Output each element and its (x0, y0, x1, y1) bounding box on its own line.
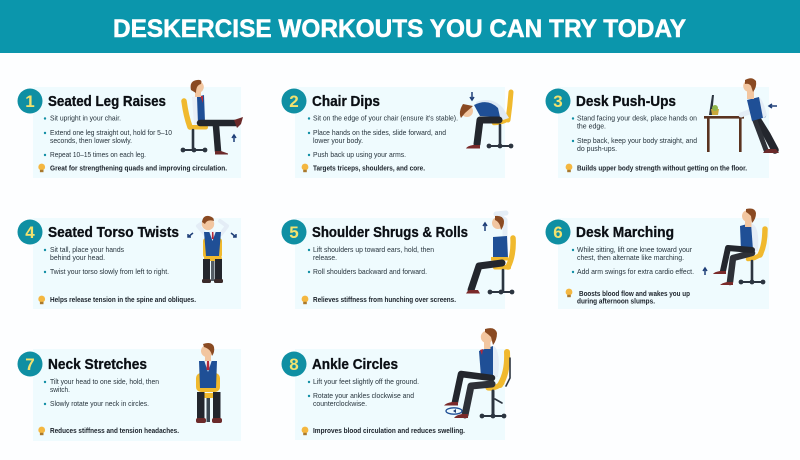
steps list: Repeat 10–15 times on each leg. (50, 150, 146, 159)
number badge 8 (282, 352, 306, 376)
title: DESKERCISE WORKOUTS YOU CAN TRY TODAY (113, 15, 686, 43)
steps list: Slowly rotate your neck in circles. (50, 399, 149, 408)
steps list (308, 377, 419, 408)
steps list: Add arm swings for extra cardio effect. (577, 267, 694, 276)
heading: Desk Marching: Desk Marching (576, 225, 674, 241)
number badge 1: 1 (25, 92, 35, 111)
arrow: ankle circle (446, 408, 462, 414)
tip: Boosts blood flow and wakes you up (579, 290, 691, 298)
arrow: up (703, 268, 707, 275)
steps list: lower your body. (313, 136, 363, 145)
number badge 8: 8 (289, 355, 299, 374)
steps list (308, 114, 458, 159)
illustration: man pushing up on desk (704, 78, 779, 153)
steps list: Place hands on the sides, slide forward, and (313, 128, 446, 137)
illustration: man bending forward on chair (460, 92, 513, 148)
arrow: twist left (188, 233, 193, 237)
steps list: Lift shoulders up toward ears, hold, then (313, 245, 434, 254)
steps list (44, 114, 172, 159)
number badge 5: 5 (289, 223, 299, 242)
number badge 3 (546, 88, 570, 114)
illustration: seated man doing ankle circles (444, 328, 510, 418)
header banner (0, 0, 800, 53)
number badge 6 (546, 220, 570, 244)
number badge 7 (18, 352, 42, 376)
number badge 5 (282, 220, 306, 244)
number badge 4 (18, 220, 42, 244)
panel: 6 Desk Marching (546, 208, 769, 309)
steps list (44, 245, 169, 276)
steps list: Sit tall, place your hands (50, 245, 124, 254)
steps list (572, 245, 694, 276)
steps list (44, 377, 159, 408)
panel: 1 Seated Leg Raises (18, 80, 243, 178)
arrow: left (769, 104, 777, 108)
tip: Improves blood circulation and reduces swelling. (313, 427, 465, 435)
tip: Great for strengthening quads and improving circulation. (50, 164, 227, 172)
number badge 3: 3 (553, 92, 563, 111)
steps list: seconds, then lower slowly. (50, 136, 132, 145)
steps list: Push back up using your arms. (313, 150, 406, 159)
tip: Builds upper body strength without getting on the floor. (577, 164, 747, 172)
number badge 2 (282, 88, 306, 114)
arrow: down (470, 92, 474, 100)
illustration: man raising one leg on chair (181, 80, 243, 154)
steps list: the edge. (577, 122, 606, 130)
panel: 4 Seated Torso Twists (18, 216, 241, 309)
steps list: Stand facing your desk, place hands on (577, 114, 697, 123)
illustration: man twisting with hands behind head (188, 216, 236, 283)
steps list: Twist your torso slowly from left to right. (50, 267, 169, 276)
number badge 4: 4 (25, 223, 35, 242)
steps list: release. (313, 253, 337, 262)
steps list: Sit upright in your chair. (50, 114, 121, 123)
heading: Seated Leg Raises: Seated Leg Raises (48, 94, 166, 110)
steps list: While sitting, lift one knee toward your (577, 245, 693, 254)
steps list: Tilt your head to one side, hold, then (50, 377, 159, 386)
panel: 2 Chair Dips (282, 87, 513, 178)
tip: Reduces stiffness and tension headaches. (50, 427, 179, 435)
arrow: up (232, 135, 236, 142)
panel: 5 Shoulder Shrugs & Rolls (282, 213, 514, 309)
number badge 1 (18, 88, 42, 114)
steps list: counterclockwise. (313, 399, 367, 408)
heading: Chair Dips: Chair Dips (312, 94, 380, 110)
steps list (572, 114, 697, 153)
steps list: Extend one leg straight out, hold for 5–10 (50, 128, 172, 137)
tip: during afternoon slumps. (577, 298, 655, 306)
steps list: chest, then alternate like marching. (577, 253, 684, 262)
steps list: Rotate your ankles clockwise and (313, 391, 414, 400)
tip: Helps release tension in the spine and obliques. (50, 296, 196, 304)
arrow: twist right (231, 233, 236, 237)
steps list: Lift your feet slightly off the ground. (313, 377, 419, 386)
number badge 6: 6 (553, 223, 563, 242)
heading: Neck Stretches: Neck Stretches (48, 357, 147, 373)
steps list: behind your head. (50, 253, 105, 262)
heading: Desk Push-Ups: Desk Push-Ups (576, 94, 676, 110)
heading: Seated Torso Twists: Seated Torso Twists (48, 225, 179, 241)
heading: Shoulder Shrugs & Rolls: Shoulder Shrugs & Rolls (312, 225, 468, 241)
tip: Targets triceps, shoulders, and core. (313, 164, 425, 172)
number badge 7: 7 (25, 355, 35, 374)
arrow: up (483, 223, 487, 231)
steps list: Step back, keep your body straight, and (577, 136, 697, 145)
illustration: seated man stretching neck, front view (196, 343, 222, 423)
steps list: do push-ups. (577, 144, 617, 153)
panel: 3 Desk Push-Ups (546, 78, 779, 178)
heading: Ankle Circles: Ankle Circles (312, 357, 398, 373)
steps list: switch. (50, 385, 70, 394)
number badge 2: 2 (289, 92, 299, 111)
steps list (308, 245, 434, 276)
panel: 7 Neck Stretches (18, 343, 241, 441)
panel: 8 Ankle Circles (282, 328, 510, 440)
illustration: seated man lifting knee (703, 208, 765, 285)
illustration: seated man with arms overhead (466, 213, 514, 294)
tip: Relieves stiffness from hunching over screens. (313, 296, 456, 304)
tip (566, 289, 691, 306)
steps list: Sit on the edge of your chair (ensure it’s stable). (313, 114, 458, 123)
steps list: Roll shoulders backward and forward. (313, 267, 427, 276)
